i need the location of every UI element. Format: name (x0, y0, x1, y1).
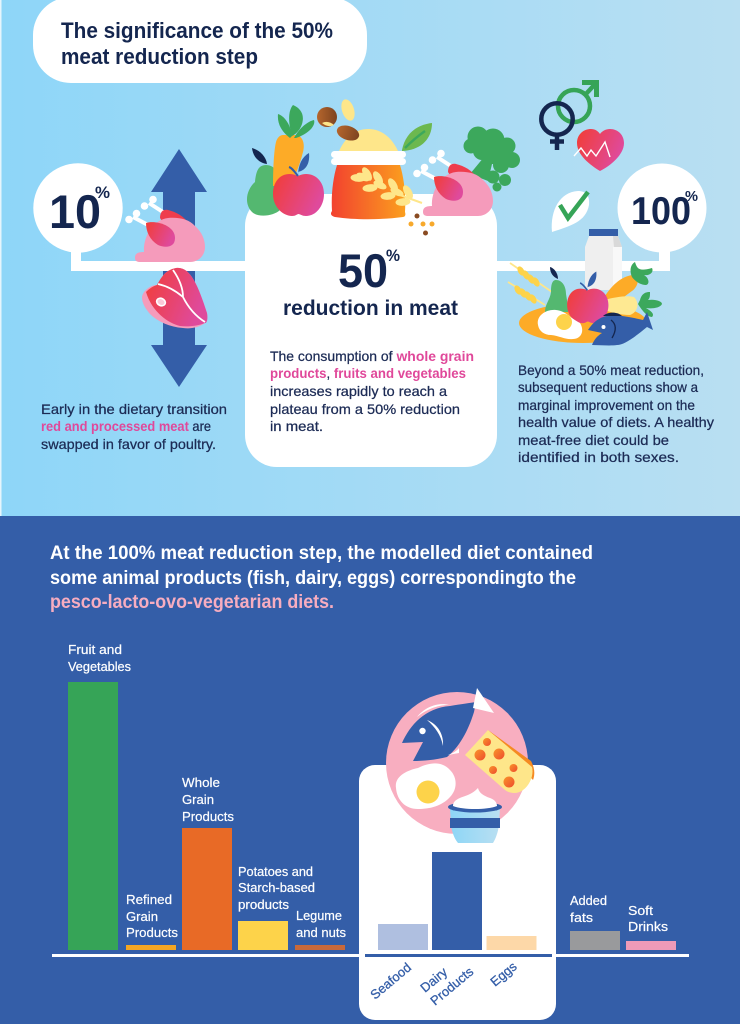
heading: 50 percent: 50 (338, 244, 388, 297)
heading: reduction in meat: reduction in meat (283, 297, 458, 320)
rotated labels: animal products: Eggs (487, 958, 520, 989)
text: beyond 50 percent: identified in both sexes. (518, 449, 679, 465)
badge: 10 percent (33, 163, 123, 253)
text: beyond 50 percent: marginal improvement on the (518, 397, 695, 413)
text: early transition: swapped in favor of poultry. (41, 436, 216, 452)
text: consumption: The consumption of whole grain (270, 348, 474, 364)
chart labels: Vegetables (68, 660, 131, 674)
rotated labels: animal products (367, 958, 520, 1008)
chart labels: Fruit and (68, 643, 122, 657)
heading: 100 percent step: At the 100% meat reduction step, the modelled diet contained (50, 543, 593, 564)
heading: 100 percent step: pesco-lacto-ovo-vegetarian diets. (50, 592, 334, 613)
text: consumption: in meat. (270, 418, 323, 434)
panel: animal products card (359, 765, 556, 1020)
text: early transition (41, 401, 227, 452)
icon: cheese (465, 730, 534, 793)
heading: 100 percent step (50, 543, 593, 613)
chart labels: Grain (126, 910, 158, 924)
badge: 10 percent: % (95, 183, 110, 202)
badge: 10 percent: 10 (49, 185, 101, 238)
icon: chicken (125, 196, 205, 262)
rotated labels: animal products: Dairy (417, 964, 451, 995)
chart labels: Starch-based (238, 881, 315, 895)
text: consumption: products, fruits and vegetables (270, 365, 466, 381)
icon: food plate (508, 262, 662, 345)
chart labels: and nuts (296, 926, 346, 940)
chart labels: Whole (182, 776, 220, 790)
chart labels: Soft (628, 904, 654, 918)
chart labels: Potatoes and (238, 865, 313, 879)
icon: gender symbols (541, 80, 599, 150)
chart labels: Legume (296, 909, 342, 923)
panel: top background (0, 0, 740, 516)
chart labels: Drinks (628, 920, 668, 934)
chart labels: Refined (126, 893, 172, 907)
chart labels: fats (570, 911, 593, 925)
text: early transition: red and processed meat are (41, 418, 211, 434)
icon: fish (402, 688, 494, 761)
timeline connector (71, 250, 670, 271)
chart labels: Products (126, 926, 178, 940)
badge: 100 percent (618, 164, 706, 252)
badge: 100 percent: % (685, 188, 698, 205)
text: consumption (270, 348, 474, 434)
heading: 100 percent step: some animal products (fish, dairy, eggs) correspondingto the (50, 568, 576, 589)
text: beyond 50 percent: meat-free diet could be (518, 432, 669, 448)
rotated labels: animal products: Seafood (367, 960, 414, 1002)
panel: 50 percent card (245, 194, 497, 467)
chart axis (52, 954, 689, 957)
text: beyond 50 percent (518, 362, 714, 465)
arrow: up and down (151, 149, 207, 387)
chart labels: Products (182, 810, 234, 824)
bar chart: animal products (365, 852, 552, 957)
text: beyond 50 percent: health value of diets. A healthy (518, 414, 714, 430)
title (33, 0, 367, 83)
icon: seeds (408, 214, 434, 236)
badge: 100 percent: 100 (631, 190, 691, 233)
title: meat reduction step (61, 44, 258, 69)
icon: nuts (317, 98, 361, 143)
rotated labels: animal products: Products (427, 964, 477, 1008)
icon: pear (247, 148, 284, 216)
text: beyond 50 percent: subsequent reductions show a (518, 379, 698, 395)
icon: heart (574, 129, 624, 171)
icon: pink circle (386, 692, 528, 834)
text: early transition: Early in the dietary transition (41, 401, 227, 417)
chart labels: Grain (182, 793, 214, 807)
icon: broccoli (464, 126, 520, 192)
icon: leaf (402, 123, 432, 151)
heading: 50 percent: % (386, 246, 400, 265)
icon: apple (273, 153, 324, 216)
icon: fried egg (396, 763, 456, 809)
panel: bottom background (0, 516, 740, 1024)
bar chart: main categories (68, 682, 676, 950)
chart labels: products (238, 898, 289, 912)
text: consumption: plateau from a 50% reduction (270, 401, 460, 417)
icon: carrot (273, 105, 314, 186)
icon: yogurt (448, 788, 502, 843)
text: consumption: increases rapidly to reach a (270, 383, 447, 399)
icon: check bubble (552, 191, 589, 232)
icon: red meat (142, 268, 207, 328)
icon: milk carton (585, 229, 622, 290)
icon: grain sack (331, 129, 422, 219)
text: beyond 50 percent: Beyond a 50% meat reduction, (518, 362, 704, 378)
chart labels: Added (570, 894, 607, 908)
icon: chicken on card (413, 150, 493, 216)
title: The significance of the 50% (61, 18, 333, 43)
panel: left edge strip (0, 0, 2, 516)
chart labels (68, 643, 668, 940)
